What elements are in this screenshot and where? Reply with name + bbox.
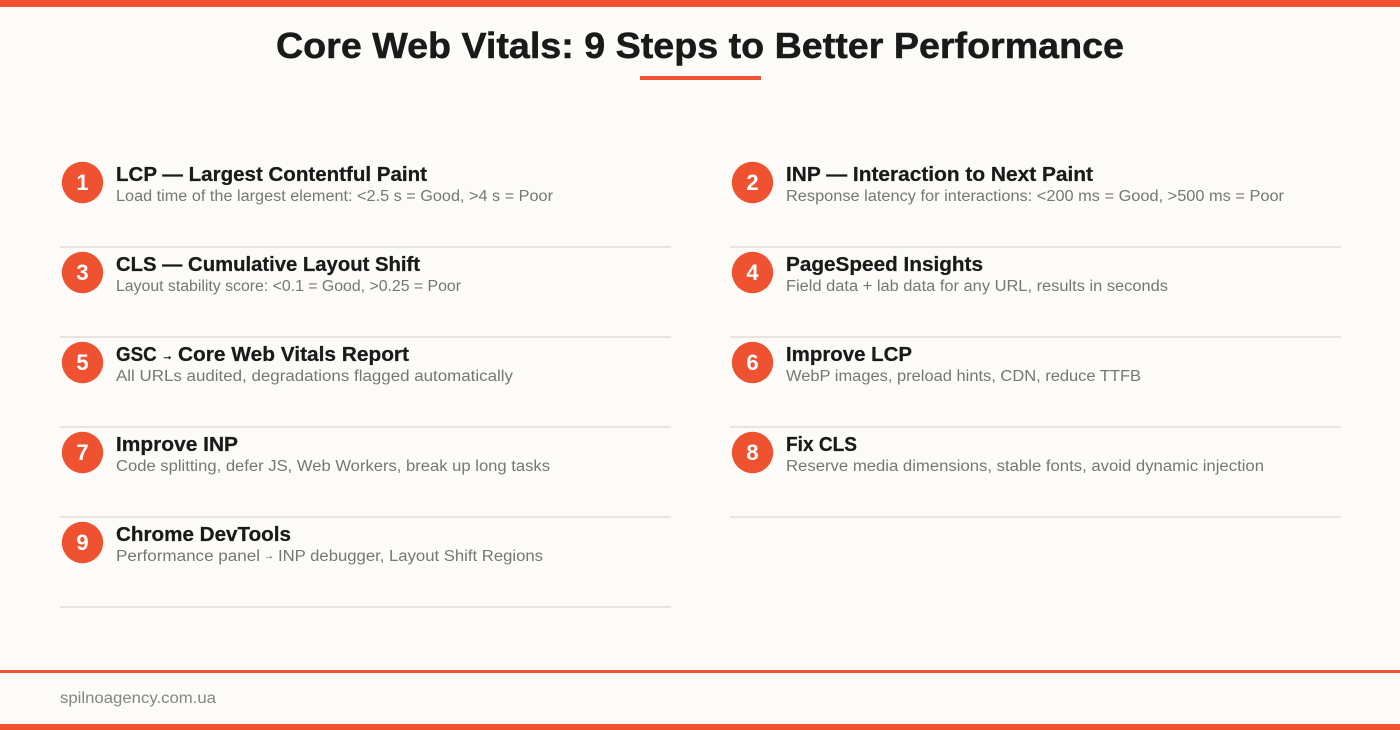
step 2: INP: INP — Interaction to Next Paint [786, 164, 1093, 186]
step 5: GSC report: 5 [76, 350, 89, 375]
step 8: Fix CLS: 8 [746, 440, 759, 465]
step 6: Improve LCP: Improve LCP [786, 344, 912, 366]
step 9: Chrome DevTools: Chrome DevTools [116, 524, 291, 546]
step 5: GSC report: GSC [116, 343, 157, 366]
step 4: PageSpeed Insights: Field data + lab data for any URL, results in seconds [786, 278, 1168, 295]
title underline [640, 76, 761, 80]
step 9: Chrome DevTools: 9 [76, 530, 89, 555]
step 5: GSC report: → [162, 350, 173, 362]
step 2: INP [730, 162, 1341, 248]
step 2: INP: 2 [746, 170, 759, 195]
title: Core Web Vitals: 9 Steps to Better Performance [276, 25, 1124, 66]
step 7: Improve INP: 7 [76, 440, 89, 465]
step 9: Chrome DevTools [60, 522, 671, 608]
step 1: LCP: Load time of the largest element: <2.5 s = Good, >4 s = Poor [116, 188, 553, 205]
step 5: GSC report [60, 342, 671, 428]
step 8: Fix CLS: Reserve media dimensions, stable fonts, avoid dynamic injection [786, 458, 1264, 475]
step 8: Fix CLS: Fix CLS [786, 434, 857, 456]
step 1: LCP: 1 [76, 170, 89, 195]
step 4: PageSpeed Insights: PageSpeed Insights [786, 254, 983, 276]
bottom accent bar [0, 724, 1400, 730]
step 1: LCP [60, 162, 671, 248]
step 4: PageSpeed Insights: 4 [746, 260, 759, 285]
step 6: Improve LCP: 6 [746, 350, 759, 375]
top accent bar [0, 0, 1400, 7]
step 3: CLS: Layout stability score: <0.1 = Good, >0.25 = Poor [116, 278, 461, 295]
footer site name: spilnoagency.com.ua [60, 690, 216, 707]
step 4: PageSpeed Insights [730, 252, 1341, 338]
step 9: Chrome DevTools: Performance panel [116, 548, 260, 565]
step 8: Fix CLS [730, 432, 1341, 518]
step 2: INP: Response latency for interactions: <200 ms = Good, >500 ms = Poor [786, 188, 1284, 205]
step 9: Chrome DevTools: INP debugger, Layout Shift Regions [278, 548, 543, 565]
step 1: LCP: LCP — Largest Contentful Paint [116, 164, 427, 186]
step 7: Improve INP [60, 432, 671, 518]
step 5: GSC report: Core Web Vitals Report [178, 344, 409, 366]
step 5: GSC report: All URLs audited, degradations flagged automatically [116, 368, 513, 385]
step 3: CLS: CLS — Cumulative Layout Shift [116, 254, 420, 276]
step 7: Improve INP: Code splitting, defer JS, Web Workers, break up long tasks [116, 458, 550, 475]
step 3: CLS: 3 [76, 260, 89, 285]
step 9: Chrome DevTools: → [264, 551, 274, 562]
step 6: Improve LCP [730, 342, 1341, 428]
step 6: Improve LCP: WebP images, preload hints, CDN, reduce TTFB [786, 368, 1141, 385]
step 3: CLS [60, 252, 671, 338]
footer rule [0, 670, 1400, 673]
step 7: Improve INP: Improve INP [116, 434, 238, 456]
